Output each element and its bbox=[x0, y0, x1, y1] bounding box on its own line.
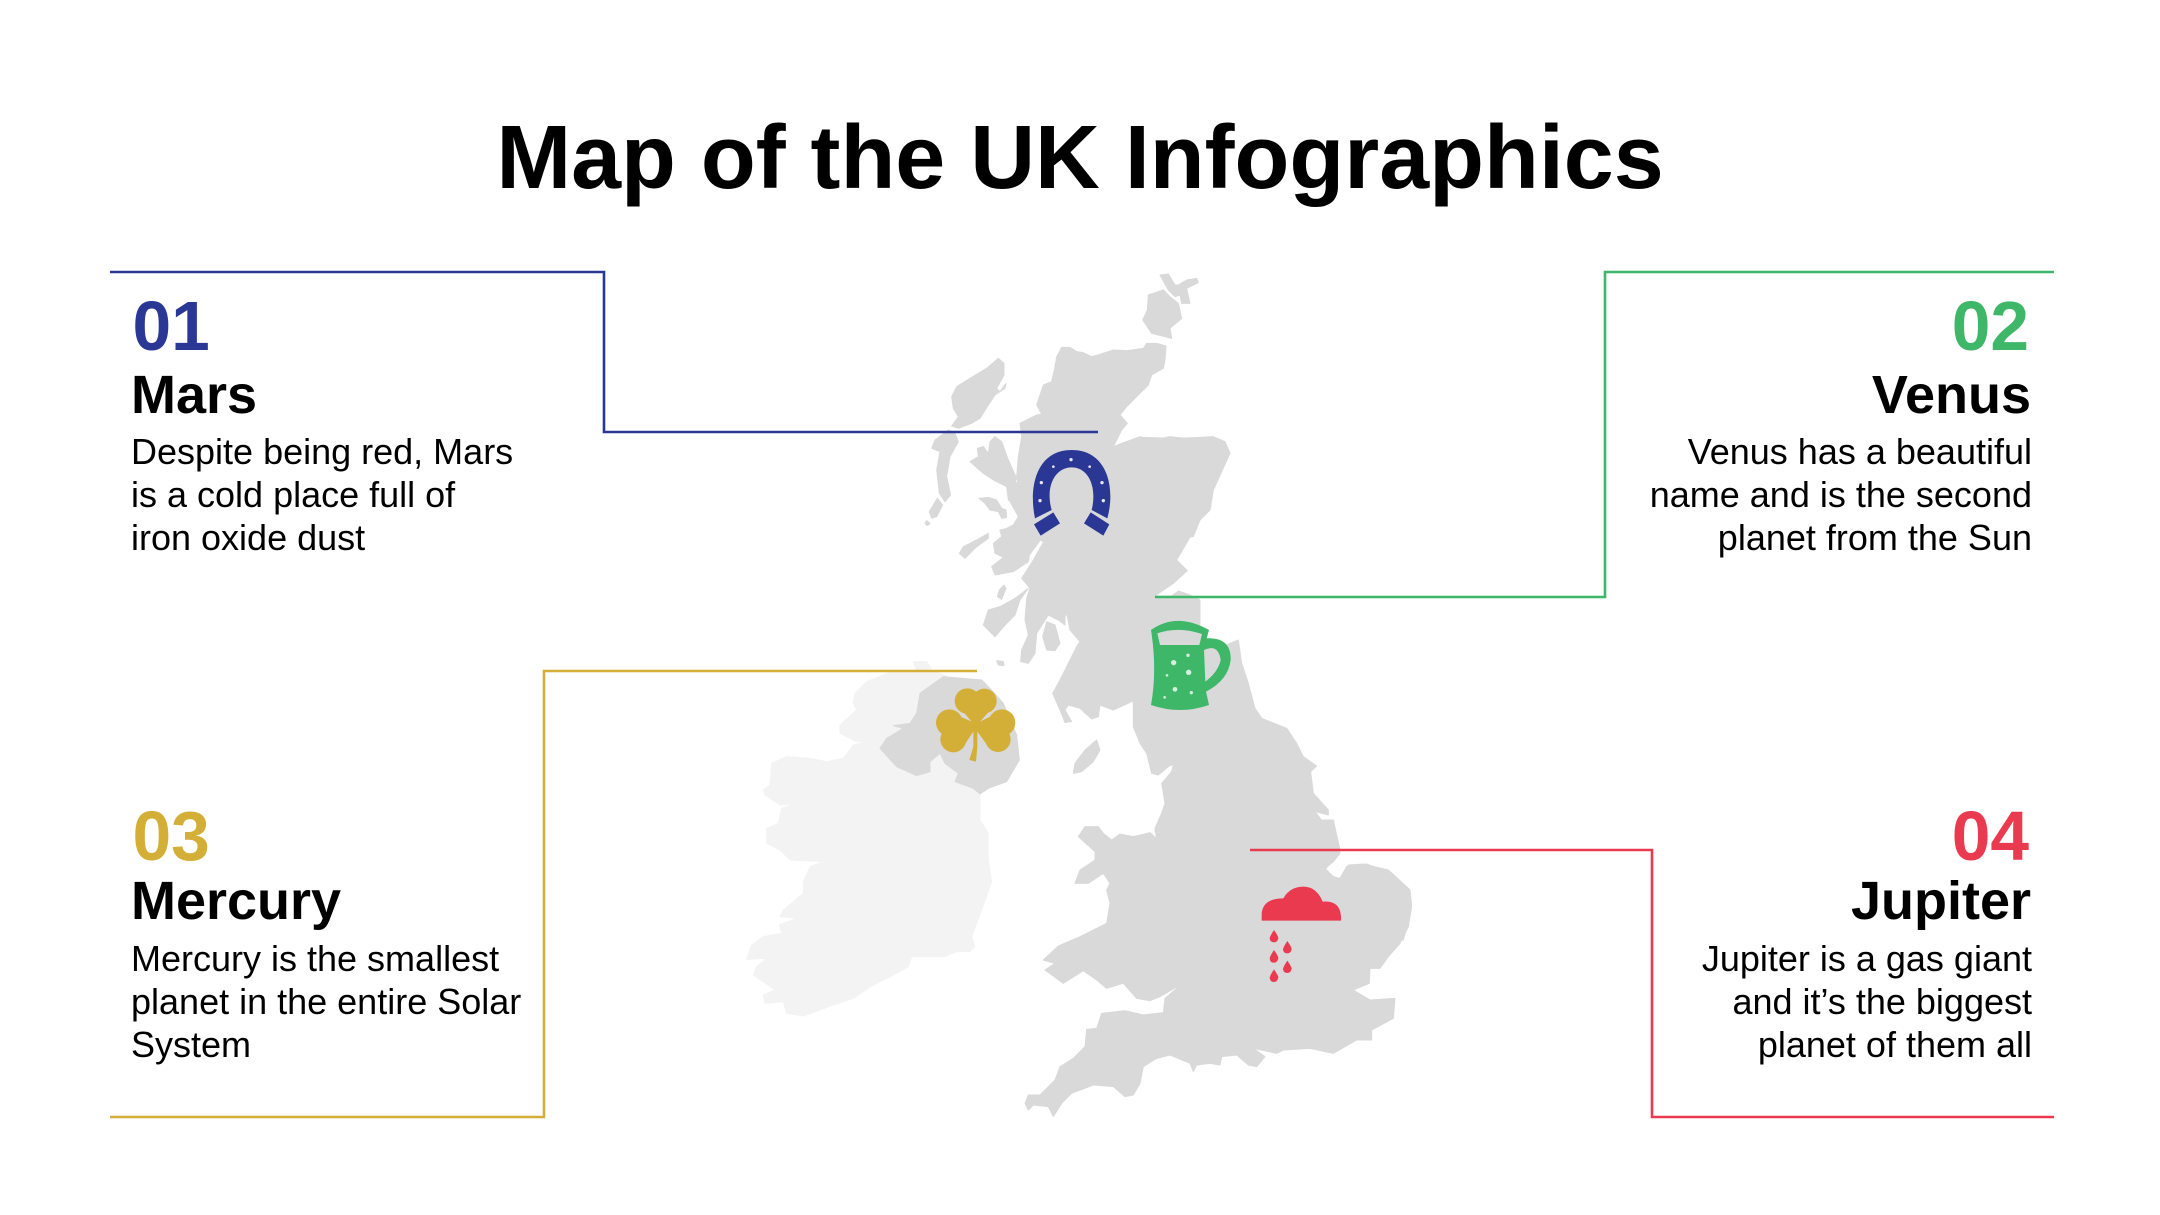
description: Jupiter: Jupiter is a gas giant bbox=[1702, 938, 2032, 978]
description: Jupiter: planet of them all bbox=[1758, 1024, 2032, 1064]
description: Venus: planet from the Sun bbox=[1718, 516, 2032, 558]
description: Mercury: planet in the entire Solar bbox=[131, 980, 521, 1022]
map: northern England bbox=[1133, 640, 1412, 940]
title: Map of the UK Infographics bbox=[496, 108, 1664, 208]
heading: Mercury: Mercury bbox=[131, 870, 341, 930]
heading: Jupiter: Jupiter bbox=[1851, 870, 2031, 930]
map: north-east Scotland bbox=[1113, 437, 1230, 540]
number 04: 04 bbox=[1952, 796, 2029, 874]
description: Jupiter bbox=[1702, 938, 2032, 1064]
description: Mercury bbox=[131, 938, 521, 1064]
description: Mercury: Mercury is the smallest bbox=[131, 938, 499, 978]
map: northern Scotland and islands bbox=[925, 274, 1200, 560]
description: Mercury: System bbox=[131, 1024, 251, 1064]
heading: Mars: Mars bbox=[131, 364, 257, 424]
panel: 03 Mercury bbox=[131, 796, 521, 1064]
heading: Venus: Venus bbox=[1872, 364, 2031, 424]
panel: 02 Venus bbox=[1650, 286, 2032, 558]
description: Venus bbox=[1650, 430, 2032, 558]
map: Republic of Ireland bbox=[747, 662, 1018, 1016]
description: Mars: is a cold place full of bbox=[131, 474, 455, 514]
description: Venus: Venus has a beautiful bbox=[1688, 430, 2032, 472]
number 01: 01 bbox=[132, 286, 210, 364]
description: Mars: iron oxide dust bbox=[131, 516, 365, 558]
number 03: 03 bbox=[132, 796, 210, 874]
description: Mars: Despite being red, Mars bbox=[131, 430, 513, 472]
panel: 01 Mars bbox=[131, 286, 513, 558]
description: Mars bbox=[131, 430, 513, 558]
description: Jupiter: and it’s the biggest bbox=[1732, 980, 2032, 1022]
map: Northern Ireland bbox=[880, 677, 1019, 794]
panel: 04 Jupiter bbox=[1702, 796, 2032, 1064]
map: central Scotland bbox=[983, 520, 1200, 773]
description: Venus: name and is the second bbox=[1650, 474, 2032, 514]
map: southern England and Wales bbox=[1025, 820, 1412, 1117]
number 02: 02 bbox=[1952, 286, 2029, 364]
